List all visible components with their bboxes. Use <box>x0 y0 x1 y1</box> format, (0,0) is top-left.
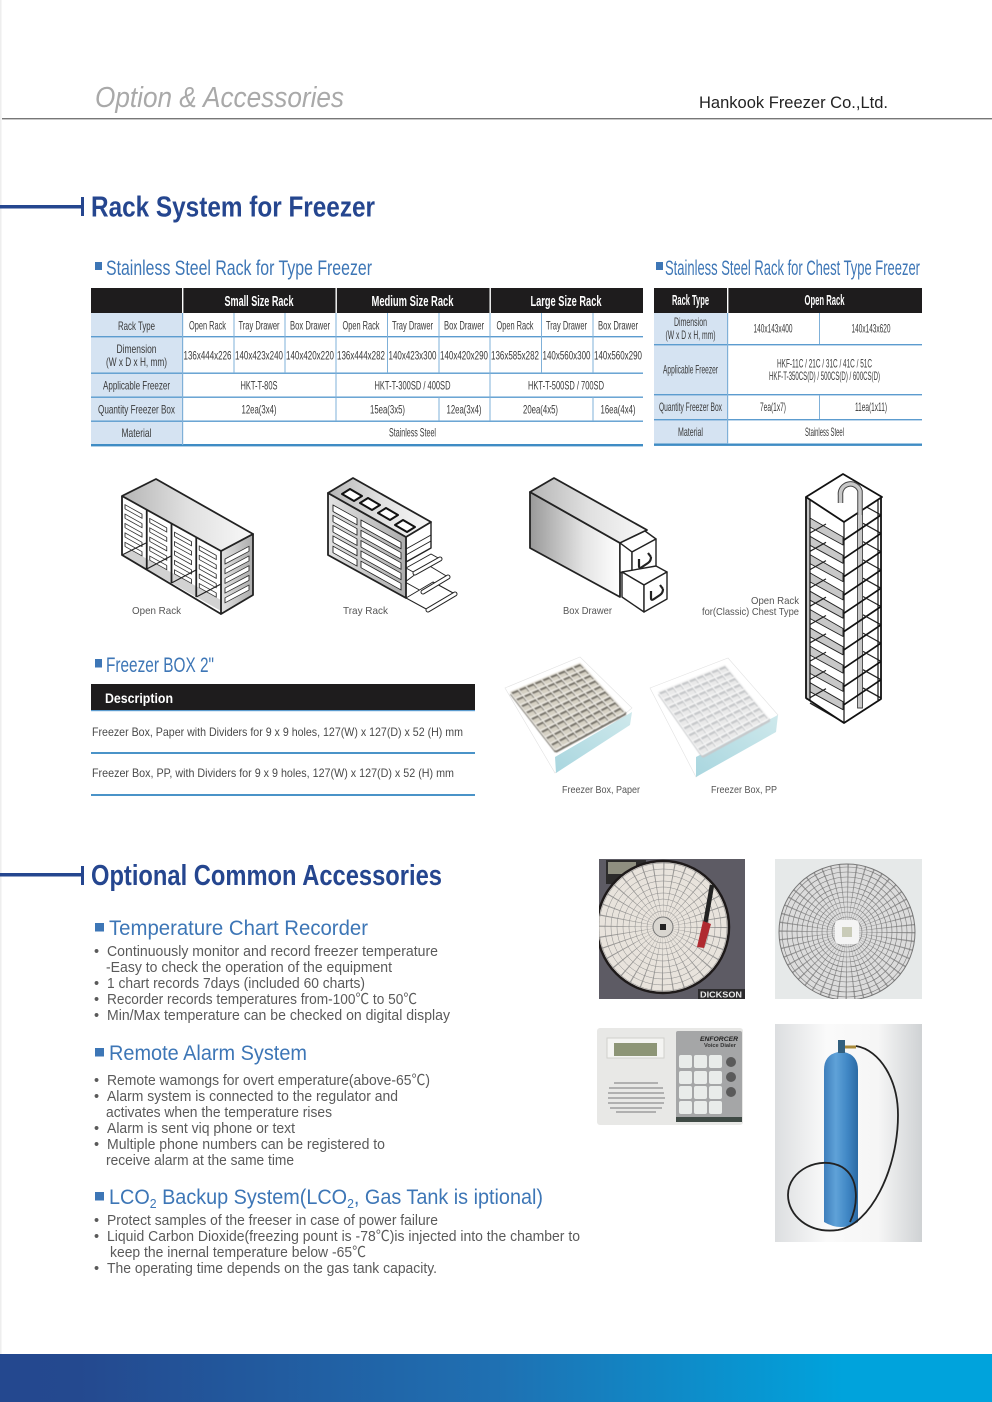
row: quantity freezer box: 12ea(3x4) <box>446 402 482 416</box>
chest table cells: Quantity Freezer Box <box>659 400 722 414</box>
row: dimension: 140x420x290 <box>440 348 488 362</box>
row: rack type: Box Drawer <box>290 318 330 332</box>
row: rack type <box>118 318 638 333</box>
photo: CO2 gas tank <box>775 1024 922 1242</box>
row: rack type: Open Rack <box>189 318 227 332</box>
bullet list: activates when the temperature rises <box>106 1105 332 1121</box>
bullet list: Alarm system is connected to the regulator and <box>107 1089 398 1105</box>
section: LCO2 backup system <box>94 1186 580 1277</box>
row: material <box>122 426 436 440</box>
row: dimension: (W x D x H, mm) <box>106 355 167 369</box>
table: freezer box description: Freezer Box, Paper with Dividers for 9 x 9 holes, 127(W) x 127(D) x 52 (H) mm <box>92 725 463 739</box>
chest table cells: Stainless Steel <box>805 425 844 439</box>
chest table cells: (W x D x H, mm) <box>666 328 716 342</box>
bullet list: The operating time depends on the gas tank capacity. <box>107 1261 437 1277</box>
bullet list: • <box>94 1008 99 1024</box>
row: rack type: Open Rack <box>342 318 380 332</box>
row: quantity freezer box: 16ea(4x4) <box>600 402 636 416</box>
row: dimension <box>106 342 642 369</box>
row: rack type: Tray Drawer <box>546 318 587 332</box>
row: material: Material <box>122 426 152 440</box>
heading: Optional Common Accessories <box>0 860 442 892</box>
row: rack type: Rack Type <box>118 319 155 333</box>
row: dimension: 140x560x290 <box>594 348 642 362</box>
row: rack type: Box Drawer <box>598 318 638 332</box>
table header labels <box>224 294 602 310</box>
table: freezer box description: Description <box>105 690 173 706</box>
row: rack type: Box Drawer <box>444 318 484 332</box>
bullet list: Remote wamongs for overt emperature(above-65℃) <box>107 1073 430 1089</box>
chest table header <box>672 293 845 309</box>
illustration captions: Open Rack <box>132 605 182 617</box>
row: rack type: Tray Drawer <box>238 318 280 332</box>
row: quantity freezer box: Quantity Freezer Box <box>98 402 175 416</box>
title: Option & Accessories <box>95 82 344 114</box>
row: dimension: 140x423x300 <box>388 348 437 362</box>
section: temperature chart recorder: Temperature Chart Recorder <box>109 917 368 940</box>
subheading: freezer box: Freezer BOX 2" <box>106 654 214 677</box>
table: chest type racks <box>654 288 922 446</box>
bullet list: Recorder records temperatures from-100℃ to 50℃ <box>107 992 417 1008</box>
table: freezer box description: Freezer Box, PP, with Dividers for 9 x 9 holes, 127(W) x 127(D) x 52 (H) mm <box>92 766 454 780</box>
section: LCO2 backup system: Backup System(LCO <box>157 1186 347 1209</box>
chest table cells: 140x143x400 <box>754 322 793 336</box>
row: applicable freezer: Applicable Freezer <box>103 378 170 392</box>
row: applicable freezer: HKT-T-80S <box>240 378 278 392</box>
photo: blank chart disc <box>775 859 922 1000</box>
section: LCO2 backup system: LCO <box>109 1186 152 1209</box>
chest table cells: Material <box>678 425 703 439</box>
bullet list: • <box>94 1261 99 1277</box>
row: dimension: 136x444x282 <box>337 348 385 362</box>
table header labels: Small Size Rack <box>224 294 294 310</box>
chest table cells: 7ea(1x7) <box>760 400 786 414</box>
bullet list: Alarm is sent viq phone or text <box>107 1121 295 1137</box>
bullet list: keep the inernal temperature below -65℃ <box>110 1245 366 1261</box>
row: dimension: 140x423x240 <box>235 348 283 362</box>
bullet list: 1 chart records 7days (included 60 charts) <box>107 976 365 992</box>
row: quantity freezer box: 12ea(3x4) <box>242 402 276 416</box>
row: applicable freezer: HKT-T-500SD / 700SD <box>528 378 604 392</box>
photo: voice dialer alarm: Voice Dialer <box>704 1043 737 1049</box>
illustration captions: Freezer Box, PP <box>711 784 777 796</box>
row: dimension: 140x560x300 <box>542 348 591 362</box>
chest table header: Rack Type <box>672 293 709 309</box>
bullet list: • <box>94 992 99 1008</box>
section: LCO2 backup system: 2 <box>150 1196 157 1211</box>
illustration captions: for(Classic) Chest Type <box>702 606 799 618</box>
row: material: Stainless Steel <box>389 426 436 440</box>
table header labels: Medium Size Rack <box>372 294 454 310</box>
extended trays <box>405 554 455 610</box>
company name: Hankook Freezer Co.,Ltd. <box>699 93 888 112</box>
subheading: upright type rack: Stainless Steel Rack for Type Freezer <box>106 257 372 280</box>
row: quantity freezer box: 20ea(4x5) <box>523 402 558 416</box>
section: remote alarm system <box>94 1042 430 1169</box>
row: dimension: Dimension <box>116 342 156 356</box>
chest table cells: Dimension <box>674 315 707 329</box>
chest table header: Open Rack <box>804 293 845 309</box>
bullet list <box>94 1073 430 1169</box>
table: upright type racks <box>91 288 643 446</box>
bullet list <box>94 944 451 1024</box>
bullet list: Continuously monitor and record freezer temperature <box>107 944 438 960</box>
bullet list: Protect samples of the freeser in case of power failure <box>107 1213 438 1229</box>
bullet list: • <box>94 1089 99 1105</box>
illustration: box drawer <box>530 478 667 612</box>
bullet list: • <box>94 1213 99 1229</box>
illustration: chest type open rack <box>806 474 882 723</box>
chest table cells: HKF-11C / 21C / 31C / 41C / 51C <box>777 356 872 370</box>
lower drawer <box>622 566 667 612</box>
illustration: open rack <box>122 479 253 614</box>
row: dimension: 136x585x282 <box>491 348 539 362</box>
upper drawer <box>620 531 656 578</box>
bullet list: • <box>94 944 99 960</box>
illustration: tray rack <box>328 478 455 610</box>
illustration captions <box>132 595 800 796</box>
heading: Rack System for Freezer: Rack System for Freezer <box>91 192 375 224</box>
illustration captions: Tray Rack <box>343 605 389 617</box>
row: applicable freezer <box>103 378 604 392</box>
bullet list <box>94 1213 580 1277</box>
photo: freezer box, paper <box>505 657 632 773</box>
heading: Rack System for Freezer <box>0 192 375 224</box>
row: dimension: 140x420x220 <box>286 348 334 362</box>
table: freezer box description <box>91 684 475 796</box>
illustration captions: Open Rack <box>751 595 800 607</box>
footer colour band <box>0 1354 992 1402</box>
photo: chart recorder: DICKSON <box>700 990 742 1000</box>
photo: voice dialer alarm: ENFORCER <box>700 1037 739 1043</box>
section: LCO2 backup system: , Gas Tank is iptional) <box>354 1186 543 1209</box>
page header <box>2 82 992 119</box>
section: LCO2 backup system: 2 <box>347 1196 354 1211</box>
chest table cells: HKF-T-350CS(D) / 500CS(D) / 600CS(D) <box>769 369 880 383</box>
bullet list: Min/Max temperature can be checked on digital display <box>107 1008 451 1024</box>
bullet list: • <box>94 1229 99 1245</box>
section: remote alarm system: Remote Alarm System <box>109 1042 307 1065</box>
bullet list: receive alarm at the same time <box>106 1153 294 1169</box>
row: rack type: Open Rack <box>496 318 534 332</box>
bullet list: Multiple phone numbers can be registered to <box>107 1137 385 1153</box>
photo: freezer box, PP <box>650 658 778 777</box>
illustration captions: Freezer Box, Paper <box>562 784 640 796</box>
row: applicable freezer: HKT-T-300SD / 400SD <box>374 378 451 392</box>
photo: voice dialer alarm <box>597 1028 743 1125</box>
bullet list: • <box>94 1073 99 1089</box>
heading: Optional Common Accessories: Optional Common Accessories <box>91 860 442 892</box>
photo: chart recorder <box>597 859 745 1000</box>
bullet list: • <box>94 1121 99 1137</box>
chest table cells: Applicable Freezer <box>663 362 718 376</box>
chest table cells <box>659 315 891 439</box>
bullet list: • <box>94 976 99 992</box>
bullet list: • <box>94 1137 99 1153</box>
row: quantity freezer box: 15ea(3x5) <box>370 402 405 416</box>
chest table cells: 140x143x620 <box>852 322 891 336</box>
bullet list: Liquid Carbon Dioxide(freezing pount is -78℃)is injected into the chamber to <box>107 1229 580 1245</box>
row: dimension: 136x444x226 <box>184 348 232 362</box>
row: quantity freezer box <box>98 402 636 416</box>
bullet list: -Easy to check the operation of the equipment <box>106 960 392 976</box>
chest table cells: 11ea(1x11) <box>855 400 887 414</box>
table header labels: Large Size Rack <box>530 294 602 310</box>
row: rack type: Tray Drawer <box>392 318 433 332</box>
illustration captions: Box Drawer <box>563 605 612 617</box>
subheading: freezer box <box>95 654 214 677</box>
section: temperature chart recorder <box>94 917 451 1024</box>
